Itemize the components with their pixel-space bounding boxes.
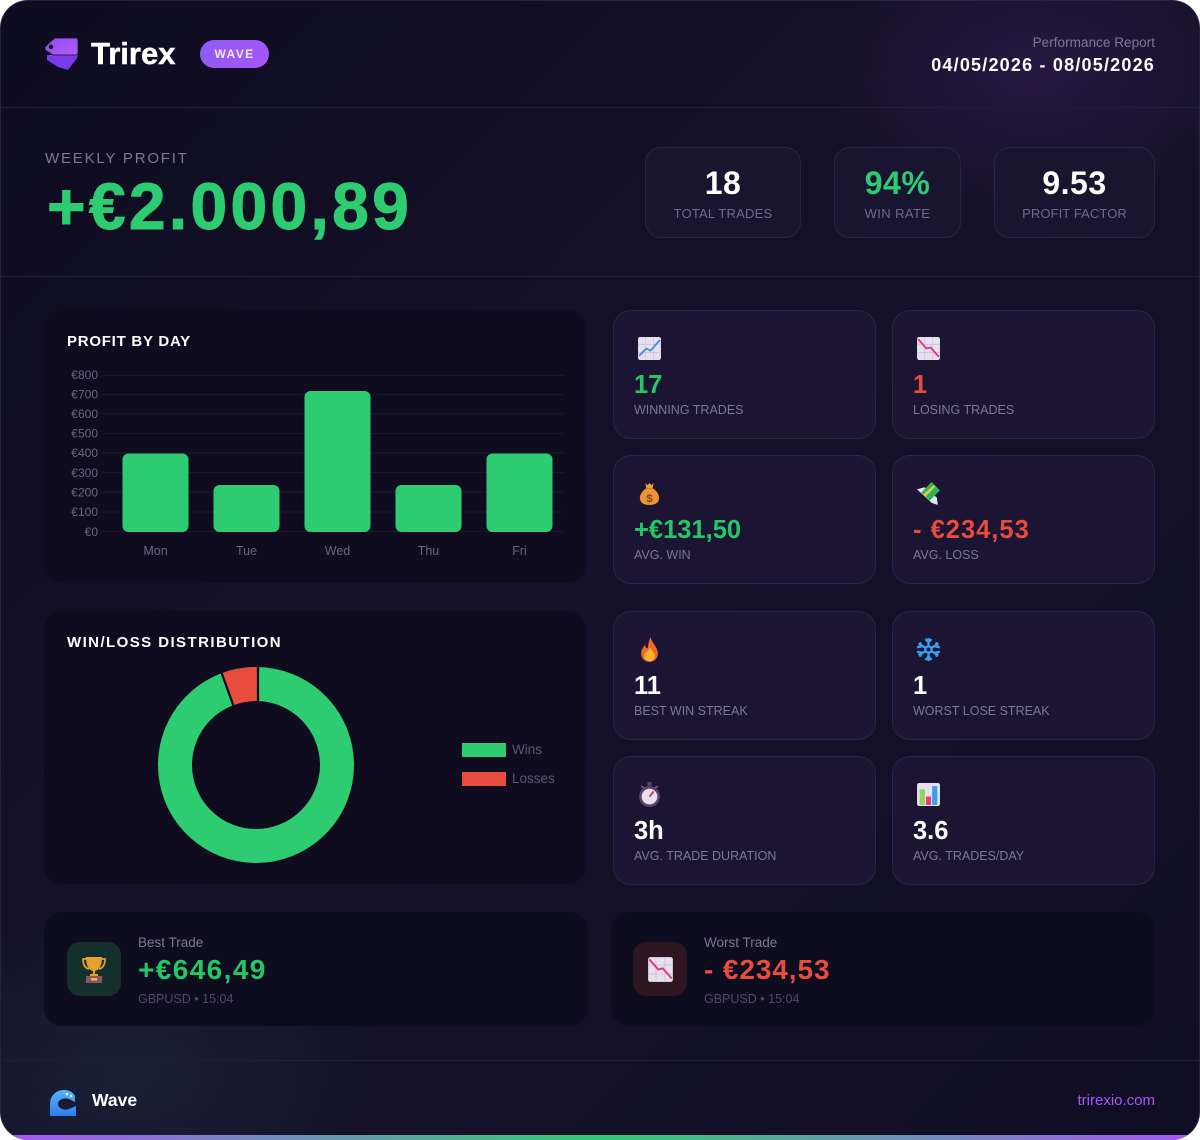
bar chart: €500 xyxy=(71,426,98,440)
label: TOTAL TRADES xyxy=(674,206,772,221)
label: Worst Trade xyxy=(704,935,777,950)
card: best win streak xyxy=(613,611,876,740)
label: WORST LOSE STREAK xyxy=(913,704,1050,718)
bar chart: €100 xyxy=(71,505,98,519)
card: average trades per day xyxy=(892,756,1155,885)
weekly profit value: +€2.000,89 xyxy=(47,169,412,243)
donut chart: Wins xyxy=(512,742,542,757)
icon: snowflake xyxy=(916,638,940,661)
value: 1 xyxy=(913,371,927,399)
icon: money bag: $ xyxy=(646,493,653,505)
bar chart: €700 xyxy=(71,388,98,402)
value: 3.6 xyxy=(913,817,948,845)
section: weekly profit xyxy=(45,150,412,243)
label: AVG. WIN xyxy=(634,548,691,562)
card: average win xyxy=(613,455,876,584)
heading: WIN/LOSS DISTRIBUTION xyxy=(67,634,282,651)
pair and time: GBPUSD • 15:04 xyxy=(704,992,799,1006)
panel: win/loss distribution xyxy=(44,611,586,884)
bar chart: Fri xyxy=(512,544,527,558)
donut chart xyxy=(158,667,555,863)
value: 3h xyxy=(634,817,664,845)
card: losing trades xyxy=(892,310,1155,439)
value: - €234,53 xyxy=(913,516,1030,544)
icon: Trirex tag logo xyxy=(45,38,78,70)
label: AVG. TRADES/DAY xyxy=(913,849,1024,863)
label: WIN RATE xyxy=(865,206,930,221)
bar chart: €400 xyxy=(71,446,98,460)
bar chart: Mon xyxy=(143,544,168,558)
value: 94% xyxy=(865,165,930,201)
brand name: Trirex xyxy=(91,36,175,71)
icon: money bag xyxy=(640,483,660,505)
bar chart: €0 xyxy=(85,525,98,539)
icon: stopwatch xyxy=(639,782,660,807)
bar chart: Tue xyxy=(236,544,257,558)
label: PROFIT FACTOR xyxy=(1022,206,1127,221)
report label: Performance Report xyxy=(1033,35,1155,50)
bar chart: Thu xyxy=(418,544,439,558)
footer xyxy=(50,1090,1155,1116)
icon: chart up xyxy=(638,337,661,360)
website link: trirexio.com xyxy=(1077,1092,1155,1109)
footer brand: Wave xyxy=(92,1090,137,1110)
value: 18 xyxy=(705,165,741,201)
icon: trophy xyxy=(67,942,121,996)
icon: money with wings xyxy=(917,482,940,505)
card: winning trades xyxy=(613,310,876,439)
value: 17 xyxy=(634,371,662,399)
weekly profit label: WEEKLY PROFIT xyxy=(45,150,189,167)
bar chart: €600 xyxy=(71,407,98,421)
value: 1 xyxy=(913,672,927,700)
heading: PROFIT BY DAY xyxy=(67,333,191,350)
icon: chart down xyxy=(917,337,940,360)
bar chart: €200 xyxy=(71,486,98,500)
header xyxy=(45,35,1155,75)
stat: total trades xyxy=(645,147,801,238)
card: worst lose streak xyxy=(892,611,1155,740)
stat: win rate xyxy=(834,147,961,238)
value: +€646,49 xyxy=(138,954,267,985)
panel: worst trade xyxy=(611,912,1155,1026)
stat: profit factor xyxy=(994,147,1155,238)
value: 9.53 xyxy=(1042,165,1107,201)
icon: flame xyxy=(641,637,658,662)
value: +€131,50 xyxy=(634,516,741,544)
card: average loss xyxy=(892,455,1155,584)
badge: WAVE: WAVE xyxy=(214,47,255,61)
icon: bar chart xyxy=(917,783,940,806)
label: AVG. TRADE DURATION xyxy=(634,849,776,863)
panel: best trade xyxy=(44,912,588,1026)
label: Best Trade xyxy=(138,935,203,950)
pair and time: GBPUSD • 15:04 xyxy=(138,992,233,1006)
bar chart: €800 xyxy=(71,368,98,382)
label: WINNING TRADES xyxy=(634,403,744,417)
value: 11 xyxy=(634,672,661,700)
card: average trade duration xyxy=(613,756,876,885)
label: AVG. LOSS xyxy=(913,548,979,562)
bar chart xyxy=(71,368,564,558)
icon: chart down xyxy=(633,942,687,996)
report date range: 04/05/2026 - 08/05/2026 xyxy=(931,55,1155,75)
icon: wave xyxy=(50,1090,76,1116)
bar chart: €300 xyxy=(71,466,98,480)
panel: profit by day xyxy=(44,310,586,583)
label: BEST WIN STREAK xyxy=(634,704,748,718)
value: - €234,53 xyxy=(704,954,830,985)
bar chart: Wed xyxy=(325,544,350,558)
donut chart: Losses xyxy=(512,771,555,786)
label: LOSING TRADES xyxy=(913,403,1014,417)
badge: WAVE xyxy=(200,40,269,68)
